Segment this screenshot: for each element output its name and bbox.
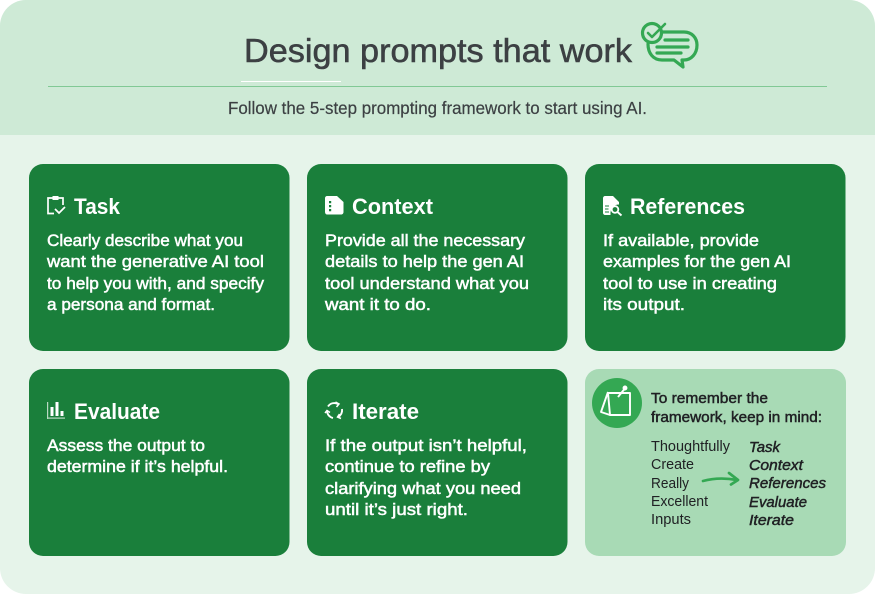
title: Design prompts that work (244, 32, 633, 69)
heading: references: References (630, 194, 745, 219)
white title underline (241, 81, 341, 82)
text: task description: want the generative AI tool (46, 252, 264, 271)
text: context description: details to help the gen AI (325, 252, 524, 271)
callout heading: framework, keep in mind: (651, 410, 822, 426)
text: evaluate description: determine if it’s helpful. (47, 457, 228, 476)
framework words: References (749, 476, 826, 492)
framework words (749, 440, 826, 529)
text: iterate description (325, 436, 527, 519)
mnemonic words (651, 439, 731, 528)
text: iterate description: If the output isn’t helpful, (325, 436, 527, 455)
text: evaluate description: Assess the output to (47, 436, 205, 455)
text: context description: tool understand what you (325, 274, 529, 293)
text: evaluate description (47, 436, 228, 476)
mnemonic words: Excellent (651, 494, 708, 510)
icon: document search (603, 196, 622, 216)
text: references description: examples for the gen AI (603, 252, 791, 271)
heading: evaluate: Evaluate (74, 399, 160, 424)
text: context description: want it to do. (324, 295, 431, 314)
text: task description: a persona and format. (47, 295, 215, 314)
heading: iterate: Iterate (352, 399, 419, 424)
panel: task (29, 164, 290, 351)
mnemonic words: Create (651, 457, 694, 473)
text: references description (603, 231, 791, 314)
text: task description: Clearly describe what you (47, 231, 243, 250)
framework words: Evaluate (749, 495, 807, 511)
text: context description: Provide all the necessary (325, 231, 526, 250)
icon: cycle arrows (325, 402, 342, 418)
heading: context: Context (352, 194, 434, 219)
framework words: Context (749, 458, 804, 474)
text: iterate description: until it’s just right. (325, 500, 468, 519)
header (48, 24, 827, 118)
icon: bar chart (47, 402, 65, 419)
icon: chat bubble with check (642, 24, 697, 67)
icon: clipboard check (48, 196, 65, 214)
text: context description (324, 231, 529, 314)
text: task description: to help you with, and specify (47, 274, 265, 293)
callout heading (651, 391, 822, 426)
mnemonic words: Thoughtfully (651, 439, 731, 455)
text: references description: its output. (603, 295, 685, 314)
heading: task: Task (74, 194, 121, 219)
mnemonic words: Really (651, 476, 690, 492)
panel: iterate (307, 369, 568, 556)
text: references description: If available, provide (603, 231, 759, 250)
text: iterate description: continue to refine by (325, 457, 491, 476)
panel: references (585, 164, 846, 351)
subtitle: Follow the 5-step prompting framework to start using AI. (228, 98, 647, 118)
panel: mnemonic callout (585, 369, 846, 556)
framework words: Task (749, 440, 781, 456)
panel: evaluate (29, 369, 290, 556)
text: iterate description: clarifying what you need (325, 479, 521, 498)
icon: pinned notes (592, 378, 642, 428)
arrow (703, 473, 738, 484)
text: task description (46, 231, 265, 314)
text: references description: tool to use in creating (603, 274, 777, 293)
mnemonic words: Inputs (651, 512, 691, 528)
callout heading: To remember the (651, 391, 768, 407)
panel: context (307, 164, 568, 351)
framework words: Iterate (749, 513, 794, 529)
icon: document (325, 196, 344, 214)
green header divider (48, 86, 827, 87)
